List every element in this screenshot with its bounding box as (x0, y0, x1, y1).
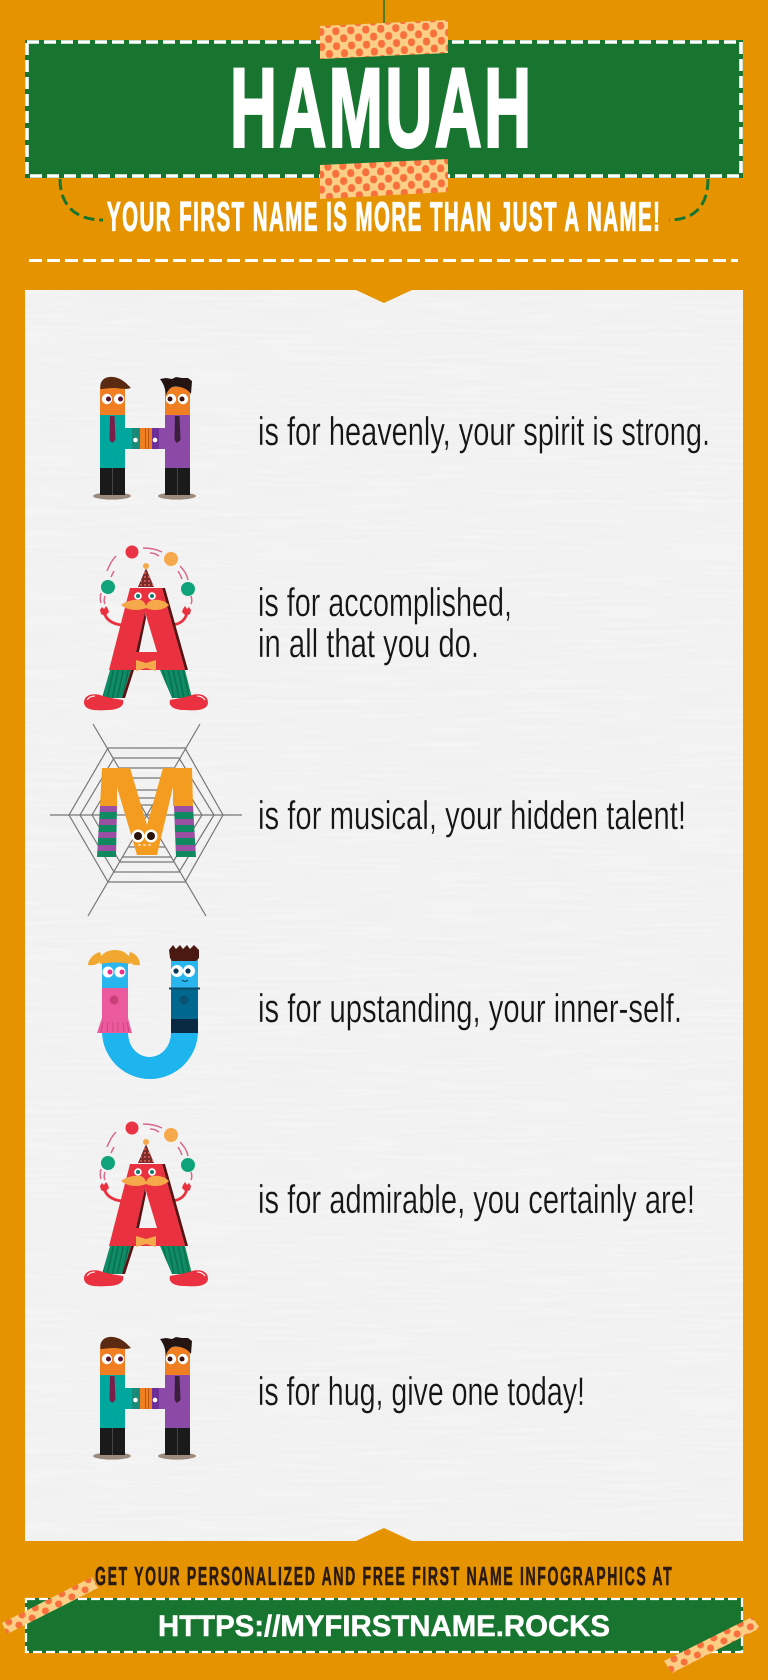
text: A row: is for accomplished, (258, 581, 512, 625)
tape: top (320, 20, 448, 59)
subtitle: YOUR FIRST NAME IS MORE THAN JUST A NAME! (107, 194, 660, 239)
title banner (25, 40, 743, 178)
panel: letters (25, 290, 743, 1541)
left curved connector (60, 179, 103, 220)
title: HAMUAH (230, 46, 531, 171)
dashed separator (29, 259, 738, 262)
icon: letter A second (84, 1122, 208, 1286)
icon: letter A first (84, 546, 208, 710)
icon: letter H first (93, 377, 196, 500)
hanging line (383, 0, 385, 24)
tape: footer left (2, 1577, 98, 1634)
text: second H row: is for hug, give one today! (258, 1370, 585, 1414)
tape: footer right (664, 1617, 760, 1673)
URL text: HTTPS://MYFIRSTNAME.ROCKS (158, 1610, 610, 1643)
footer call to action: GET YOUR PERSONALIZED AND FREE FIRST NAME INFOGRAPHICS AT (95, 1563, 672, 1591)
icon: letter H second (93, 1337, 196, 1460)
text: A row: in all that you do. (258, 622, 479, 666)
tape: bottom (320, 159, 448, 199)
footer URL banner (25, 1598, 743, 1653)
right curved connector (669, 179, 708, 220)
icon: letter M with web (50, 724, 242, 916)
text: A row (258, 581, 512, 666)
icon: letter U (88, 945, 200, 1079)
